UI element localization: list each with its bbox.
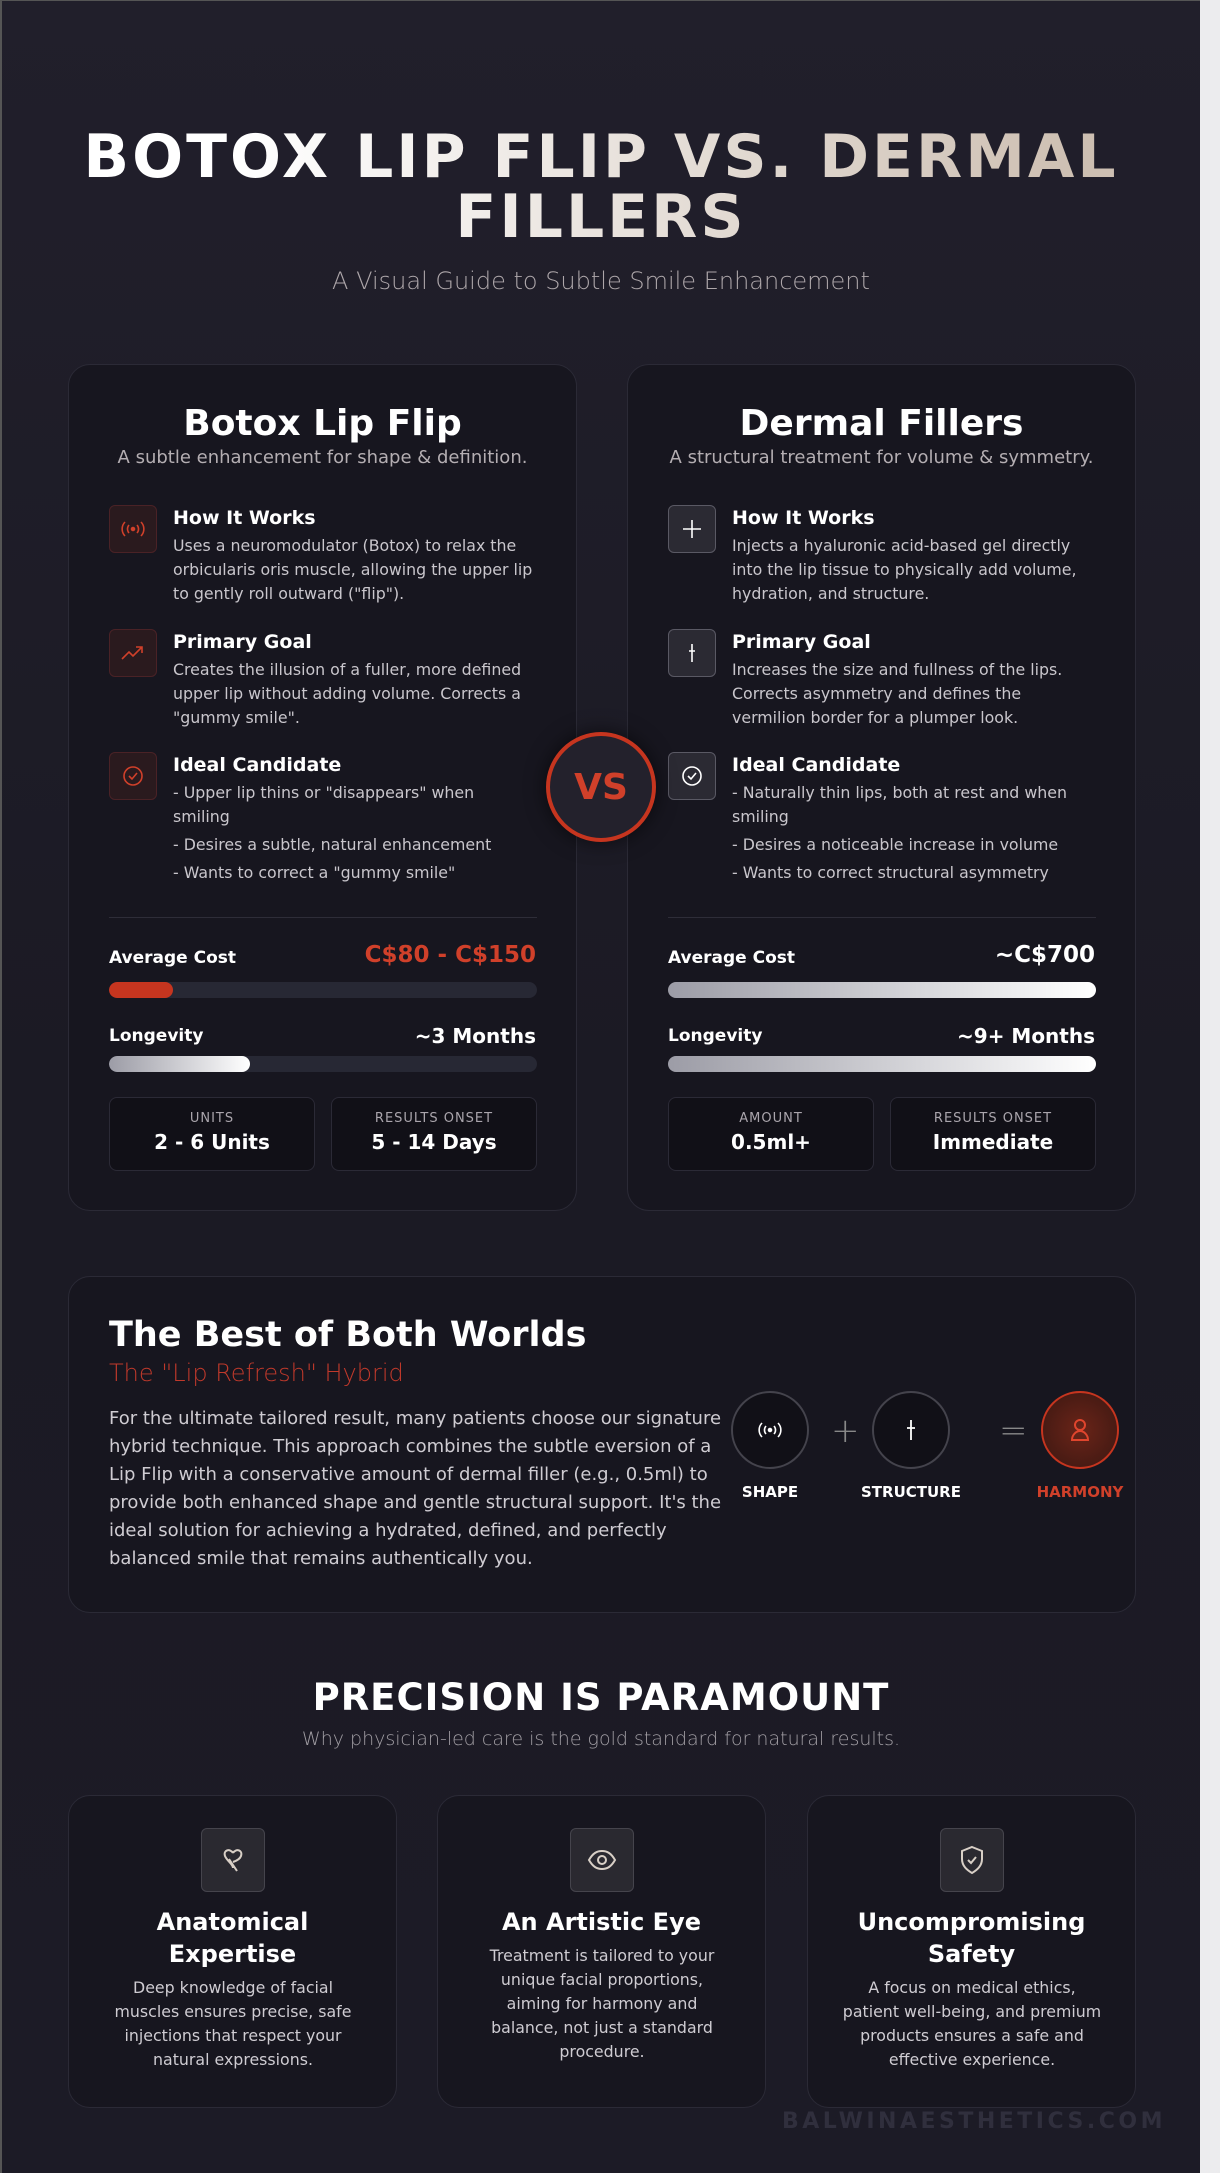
stat: average cost: ~C$700 (995, 942, 1095, 968)
stat box: units (109, 1097, 315, 1171)
item: ideal candidate (668, 752, 1067, 882)
item: primary goal: Increases the size and fullness of the lips. Corrects asymmetry and defines the vermilion border for a plumper look. (732, 660, 1062, 727)
stat box: units: UNITS (190, 1111, 234, 1126)
stat: longevity: ~9+ Months (957, 1024, 1095, 1048)
card: artistic eye: Treatment is tailored to your unique facial proportions, aiming for harmony and balance, not just a standard procedure. (490, 1946, 714, 2061)
stat box: amount: 0.5ml+ (731, 1130, 811, 1154)
card: safety: effective experience. (889, 2050, 1055, 2069)
stat: longevity (668, 1024, 1096, 1072)
stat box: amount (668, 1097, 874, 1171)
icon: anatomy (201, 1828, 265, 1892)
stat: longevity (109, 1024, 537, 1072)
item: how it works: Uses a neuromodulator (Botox) to relax the orbicularis oris muscle, allowing the upper lip to gently roll outward ("flip"). (173, 536, 532, 603)
equation diagram: = (999, 1411, 1028, 1451)
icon: signal (109, 505, 157, 553)
card: anatomical expertise: Expertise (169, 1940, 296, 1968)
heading: The Best of Both Worlds (109, 1315, 586, 1355)
card title: Dermal Fillers (740, 403, 1023, 444)
stat box: results onset (331, 1097, 537, 1171)
icon: check (109, 752, 157, 800)
stat: average cost (109, 942, 537, 998)
icon: shield (940, 1828, 1004, 1892)
watermark: BALWINAESTHETICS.COM (782, 2109, 1166, 2134)
icon: plus (668, 505, 716, 553)
item: primary goal (668, 629, 1062, 727)
item: primary goal: Primary Goal (173, 631, 312, 653)
icon: harmony (1041, 1391, 1119, 1469)
item: ideal candidate: - Wants to correct a "gummy smile" (173, 863, 455, 882)
icon: eye (570, 1828, 634, 1892)
equation diagram: SHAPE (742, 1483, 798, 1501)
item: primary goal: Primary Goal (732, 631, 871, 653)
stat: average cost (668, 942, 1096, 998)
stat box: amount: AMOUNT (739, 1111, 803, 1126)
subtitle: A Visual Guide to Subtle Smile Enhancement (332, 267, 870, 295)
item: ideal candidate: - Desires a subtle, natural enhancement (173, 835, 491, 854)
item: primary goal (109, 629, 521, 727)
card: anatomical expertise (68, 1795, 397, 2108)
section heading: precision: PRECISION IS PARAMOUNT (313, 1676, 889, 1719)
icon: syringe (668, 629, 716, 677)
stat: longevity: Longevity (668, 1026, 762, 1046)
stat box: results onset: Immediate (933, 1130, 1053, 1154)
item: ideal candidate: - Wants to correct structural asymmetry (732, 863, 1049, 882)
section subtitle: Why physician-led care is the gold standard for natural results. (302, 1728, 900, 1750)
item: how it works (109, 505, 532, 603)
item: ideal candidate (109, 752, 491, 882)
item: how it works: How It Works (732, 507, 875, 529)
paragraph: For the ultimate tailored result, many patients choose our signature hybrid technique. This approach combines the subtle eversion of a Lip Flip with a conservative amount of dermal filler (e.g., 0.5ml) to provide both enhanced shape and gentle structural support. It's the ideal solution for achieving a hydrated, defined, and perfectly balanced smile that remains authentically you. (109, 1408, 721, 1569)
title: FILLERS (455, 182, 747, 252)
title (2, 127, 1200, 247)
stat box: results onset (890, 1097, 1096, 1171)
card subtitle: A structural treatment for volume & symmetry. (670, 447, 1093, 468)
item: ideal candidate: - Naturally thin lips, both at rest and when smiling (732, 783, 1067, 826)
card: safety: Uncompromising (858, 1908, 1085, 1936)
stat: longevity: Longevity (109, 1026, 203, 1046)
card: anatomical expertise: Anatomical (157, 1908, 308, 1936)
equation diagram: STRUCTURE (861, 1483, 961, 1501)
panel: botox lip flip (68, 364, 577, 1211)
item: ideal candidate: - Upper lip thins or "disappears" when (173, 783, 474, 802)
panel: best of both worlds (68, 1276, 1136, 1613)
item: ideal candidate: Ideal Candidate (732, 754, 900, 776)
equation diagram: + (831, 1411, 860, 1451)
card: anatomical expertise: Deep knowledge of facial muscles ensures precise, safe injections that respect your natural expressions. (115, 1978, 351, 2069)
icon: trend (109, 629, 157, 677)
stat: average cost: Average Cost (109, 948, 236, 968)
panel: dermal fillers (627, 364, 1136, 1211)
card: safety: patient well-being, and premium (843, 2002, 1101, 2021)
card: artistic eye: An Artistic Eye (502, 1908, 701, 1936)
stat box: results onset: RESULTS ONSET (375, 1111, 493, 1126)
stat box: results onset: 5 - 14 Days (371, 1130, 497, 1154)
item: ideal candidate: - Desires a noticeable increase in volume (732, 835, 1058, 854)
icon: structure (872, 1391, 950, 1469)
card: artistic eye (437, 1795, 766, 2108)
item: ideal candidate: smiling (173, 807, 230, 826)
item: how it works: Injects a hyaluronic acid-based gel directly into the lip tissue to physically add volume, hydration, and structure. (732, 536, 1077, 603)
item: how it works: How It Works (173, 507, 316, 529)
card: safety (807, 1795, 1136, 2108)
equation diagram (731, 1391, 1124, 1501)
card: safety: products ensures a safe and (860, 2026, 1084, 2045)
card subtitle: A subtle enhancement for shape & definition. (118, 447, 527, 468)
card: safety: A focus on medical ethics, (868, 1978, 1076, 1997)
item: how it works (668, 505, 1077, 603)
icon: shape (731, 1391, 809, 1469)
item: ideal candidate: Ideal Candidate (173, 754, 341, 776)
subheading: The "Lip Refresh" Hybrid (109, 1359, 404, 1387)
stat box: results onset: RESULTS ONSET (934, 1111, 1052, 1126)
stat: average cost: Average Cost (668, 948, 795, 968)
stat box: units: 2 - 6 Units (154, 1130, 270, 1154)
vs badge (546, 732, 656, 842)
equation diagram: HARMONY (1037, 1483, 1123, 1501)
card title: Botox Lip Flip (183, 403, 462, 444)
vs badge: VS (574, 766, 628, 808)
stat: longevity: ~3 Months (415, 1024, 536, 1048)
stat: average cost: C$80 - C$150 (365, 942, 536, 968)
item: primary goal: Creates the illusion of a fuller, more defined upper lip without adding volume. Corrects a "gummy smile". (173, 660, 521, 727)
card: safety: Safety (928, 1940, 1015, 1968)
title: BOTOX LIP FLIP VS. DERMAL (83, 122, 1119, 192)
icon: check (668, 752, 716, 800)
